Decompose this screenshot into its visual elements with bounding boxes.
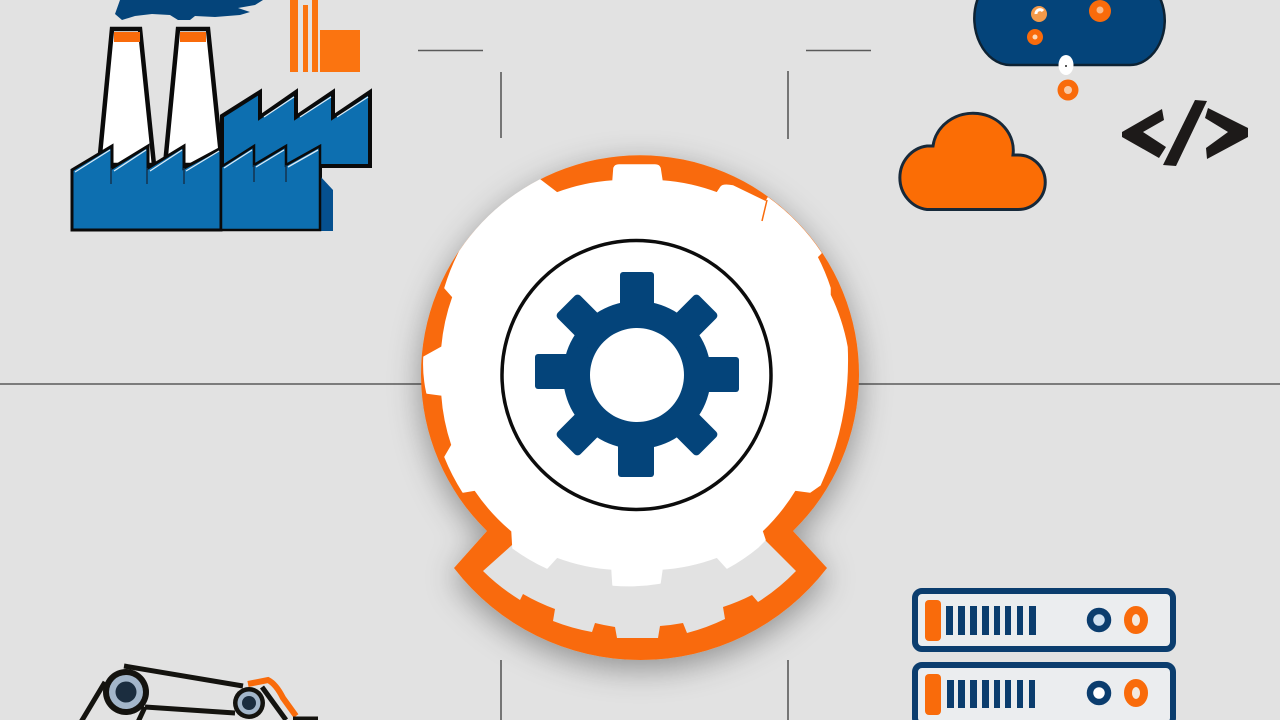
icon: robot arm [81, 666, 318, 720]
grey lower gear cut-out [483, 540, 796, 638]
orange gear ring [421, 155, 859, 660]
central gear badge [421, 155, 859, 660]
orange chart bars [290, 0, 360, 72]
icon: blue cog [535, 272, 739, 477]
nodes [1031, 6, 1047, 22]
back building [222, 92, 370, 200]
sliver of orange on white face [762, 200, 767, 221]
server unit bottom [915, 665, 1173, 720]
icon: blue cloud with nodes [974, 0, 1165, 100]
icon: orange cloud [900, 113, 1045, 210]
icon: code brackets [1122, 100, 1248, 166]
side block [320, 176, 333, 231]
icon: factory [72, 0, 370, 231]
server unit top [915, 591, 1173, 649]
front building [72, 146, 221, 230]
black inner circle [502, 240, 771, 510]
chimney right [165, 29, 222, 165]
chimney left [99, 29, 154, 165]
icon: server rack [915, 591, 1173, 720]
roof highlights [75, 97, 368, 172]
white gear face [424, 165, 847, 586]
smoke cloud [115, 0, 263, 20]
